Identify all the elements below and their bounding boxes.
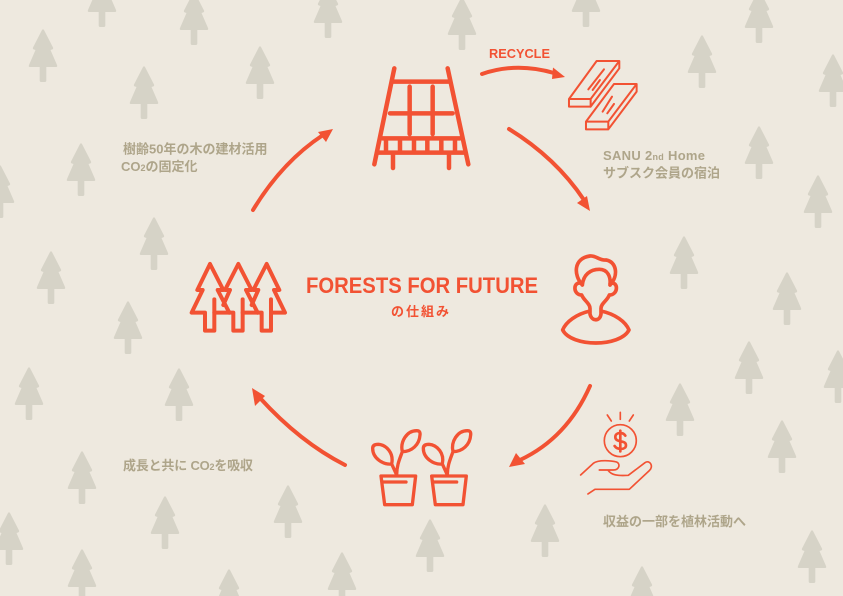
icon: lumber planks [569,61,637,129]
arrow: trees to building [253,129,333,210]
text: CO2 fixation by building use: 樹齢50年の木の建材活用 [123,142,267,156]
arrow: seedlings to trees [252,388,345,465]
text: subscription stay: サブスク会員の宿泊 [603,166,720,180]
label: recycle: RECYCLE [489,47,550,61]
text: SANU 2nd Home: SANU 2nd Home [603,148,705,163]
icon: timber building [374,68,468,168]
icon: potted seedlings [373,431,471,505]
arrow: recycle [482,68,565,79]
text: CO2 fixation: CO2の固定化 [121,159,198,174]
text: absorb CO2 with growth: 成長と共に CO2を吸収 [123,458,253,473]
icon: person [563,256,629,343]
arrow: building to member [509,129,590,211]
title: FORESTS FOR FUTURE [306,273,538,298]
icon: coin over hand [581,412,651,494]
text: portion of revenue to planting: 収益の一部を植林活動へ [603,514,746,529]
icon: three trees [192,264,285,331]
arrow: member to revenue [509,386,590,467]
subtitle: の仕組み [391,304,451,319]
